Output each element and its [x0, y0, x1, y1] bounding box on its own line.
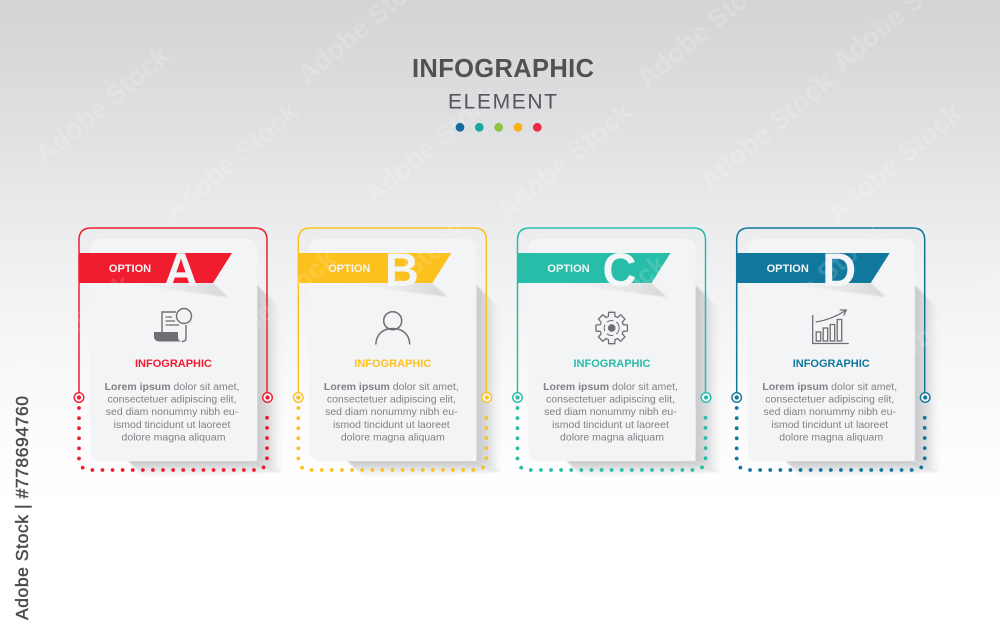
panel: option D: dolore magna aliquam	[779, 431, 883, 443]
panel: option C: INFOGRAPHIC	[574, 358, 651, 370]
panel: option A: Lorem ipsum dolor sit amet,	[105, 381, 239, 393]
watermarks over panels: Adobe Stock	[196, 243, 343, 373]
watermarks: Adobe Stock	[158, 96, 305, 226]
panel: option D: sed diam nonummy nibh eu-	[763, 406, 896, 418]
panel: option C: C	[603, 243, 636, 296]
panel: option C: OPTION	[547, 263, 590, 275]
title: ELEMENT	[448, 90, 557, 114]
panel: option C	[513, 228, 722, 479]
panel: option A: ismod tincidunt ut laoreet	[114, 419, 230, 431]
panel: option B: INFOGRAPHIC	[354, 358, 431, 370]
panel: option D: consectetuer adipiscing elit,	[765, 394, 894, 406]
panel: option B: ismod tincidunt ut laoreet	[333, 419, 450, 431]
watermarks over panels	[0, 213, 1000, 398]
colored dots	[456, 123, 542, 132]
watermarks	[29, 0, 973, 228]
watermarks over panels: Adobe Stock	[326, 213, 473, 343]
panel: option C: sed diam nonummy nibh eu-	[544, 406, 677, 418]
panel: option B: B	[385, 243, 419, 296]
panel: option B: sed diam nonummy nibh eu-	[325, 406, 458, 418]
watermarks: Adobe Stock	[821, 98, 968, 228]
panel: option D: INFOGRAPHIC	[793, 358, 870, 370]
panel: option A: OPTION	[109, 263, 151, 275]
panel: option B: dolore magna aliquam	[341, 431, 445, 443]
watermarks over panels: Adobe Stock	[526, 248, 673, 378]
watermarks: Adobe Stock	[358, 80, 505, 210]
panel: option A: consectetuer adipiscing elit,	[108, 394, 237, 406]
panel: option D	[732, 228, 941, 479]
watermarks: Adobe Stock	[491, 96, 638, 226]
icon: document and magnifier	[154, 308, 192, 342]
watermarks: Adobe Stock	[693, 66, 840, 196]
watermarks over panels: Adobe Stock	[741, 218, 888, 348]
title	[412, 55, 594, 114]
panel: option C: dolore magna aliquam	[560, 431, 664, 443]
icon: gear	[596, 312, 627, 344]
panel: option C: Lorem ipsum dolor sit amet,	[543, 381, 678, 393]
title: INFOGRAPHIC	[412, 55, 594, 83]
panel: option D: Lorem ipsum dolor sit amet,	[762, 381, 897, 393]
panel: option B	[294, 228, 502, 479]
icon: person	[376, 312, 410, 344]
panel: option A	[74, 228, 283, 479]
panel: option C: ismod tincidunt ut laoreet	[552, 419, 669, 431]
watermarks: Adobe Stock	[29, 40, 176, 170]
panel: option B: Lorem ipsum dolor sit amet,	[324, 381, 459, 393]
panel: option D: OPTION	[767, 263, 809, 275]
panel: option B: OPTION	[328, 263, 370, 275]
panel: option D: D	[822, 243, 856, 296]
panel: option D: ismod tincidunt ut laoreet	[771, 419, 888, 431]
panel: option A: INFOGRAPHIC	[135, 358, 212, 370]
panel: option B: consectetuer adipiscing elit,	[327, 394, 456, 406]
stock id side text: Adobe Stock | #778694760	[12, 396, 32, 620]
panel: option C: consectetuer adipiscing elit,	[546, 394, 675, 406]
panel: option A: sed diam nonummy nibh eu-	[106, 406, 239, 418]
panel: option A: dolore magna aliquam	[122, 431, 226, 443]
panel: option A: A	[164, 243, 198, 296]
icon: growth chart	[813, 310, 849, 344]
